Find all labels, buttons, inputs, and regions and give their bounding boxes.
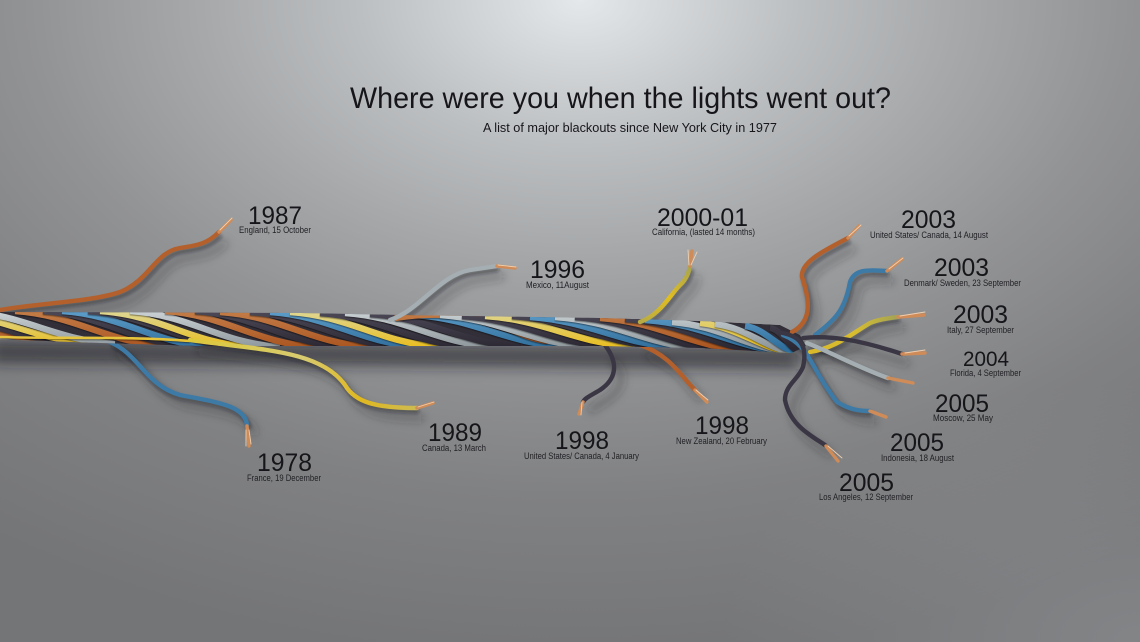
wire: 1989 Canada [190, 340, 434, 408]
label: 2005 Los Angeles: Los Angeles, 12 September [819, 492, 913, 502]
label: 2003 Italy [947, 301, 1014, 335]
label: 2004: Florida, 4 September [950, 368, 1021, 378]
label: 2000-01: 2000-01 [657, 204, 748, 232]
label: 1998 United States: 1998 [555, 427, 609, 455]
wire: 2003 Denmark / Sweden [815, 258, 903, 335]
label: 2003 Denmark / Sweden: 2003 [934, 254, 989, 282]
wire: 2004 Florida [803, 337, 925, 354]
label: 1998 New Zealand: 1998 [695, 412, 749, 440]
label: 2005 Indonesia: Indonesia, 18 August [881, 453, 954, 463]
wire: 1989 yellow strand along cable [0, 337, 190, 341]
label: 2004 [950, 348, 1021, 378]
label: 1987: England, 15 October [239, 225, 311, 235]
label: 1998 United States [524, 427, 639, 461]
wire: 2000-01 California [640, 250, 697, 322]
label: 2003 United States / Canada: 2003 [901, 206, 956, 234]
subtitle: A list of major blackouts since New York City in 1977 [483, 121, 777, 135]
wire: 2005 Moscow [807, 343, 913, 383]
label: 2003 Denmark / Sweden [904, 254, 1021, 288]
label: 1998 New Zealand: New Zealand, 20 February [676, 436, 767, 446]
label: 2003 United States / Canada: United States/ Canada, 14 August [870, 230, 988, 240]
label: 1996: Mexico, 11August [526, 280, 589, 290]
wire: 2003 Italy [810, 312, 925, 352]
wire: 1996 Mexico [390, 265, 516, 320]
title: Where were you when the lights went out? [350, 82, 891, 115]
braided cable [0, 311, 806, 354]
wire: 1998 New Zealand [640, 345, 708, 402]
label: 1998 United States: United States/ Canada, 4 January [524, 451, 639, 461]
wire: 1987 England [0, 218, 232, 310]
label: 2005 Moscow: Moscow, 25 May [933, 413, 993, 423]
label: 2003 Denmark / Sweden: Denmark/ Sweden, 23 September [904, 278, 1021, 288]
label: 2005 Los Angeles [819, 469, 913, 502]
label: 1987: 1987 [248, 202, 302, 230]
label: 2003 United States / Canada [870, 206, 988, 240]
label: 2005 Indonesia [881, 429, 954, 463]
label: 1989: Canada, 13 March [422, 443, 486, 453]
wire: 2003 United States / Canada [792, 225, 861, 332]
label: 1978 [247, 449, 321, 483]
label: 2005 Indonesia: 2005 [890, 429, 944, 457]
wire: 1998 United States [579, 345, 614, 415]
label: 2004: 2004 [963, 348, 1009, 371]
label: 1987 [239, 202, 311, 235]
label: 1998 New Zealand [676, 412, 767, 446]
label: 1989: 1989 [428, 419, 482, 447]
label: 2003 Italy: 2003 [953, 301, 1008, 329]
label: 2005 Los Angeles: 2005 [839, 469, 894, 497]
label: 2005 Moscow: 2005 [935, 390, 989, 418]
wire shadows [0, 236, 909, 455]
label: 2003 Italy: Italy, 27 September [947, 325, 1014, 335]
label: 2000-01: California, (lasted 14 months) [652, 227, 755, 237]
wire: 1978 France [110, 342, 251, 446]
cable core [0, 312, 806, 348]
label: 1978: France, 19 December [247, 473, 321, 483]
wire: 2005 Los Angeles [777, 332, 842, 461]
wire: 2005 Indonesia [783, 335, 886, 417]
label: 1978: 1978 [257, 449, 312, 477]
label: 1996: 1996 [530, 256, 585, 284]
